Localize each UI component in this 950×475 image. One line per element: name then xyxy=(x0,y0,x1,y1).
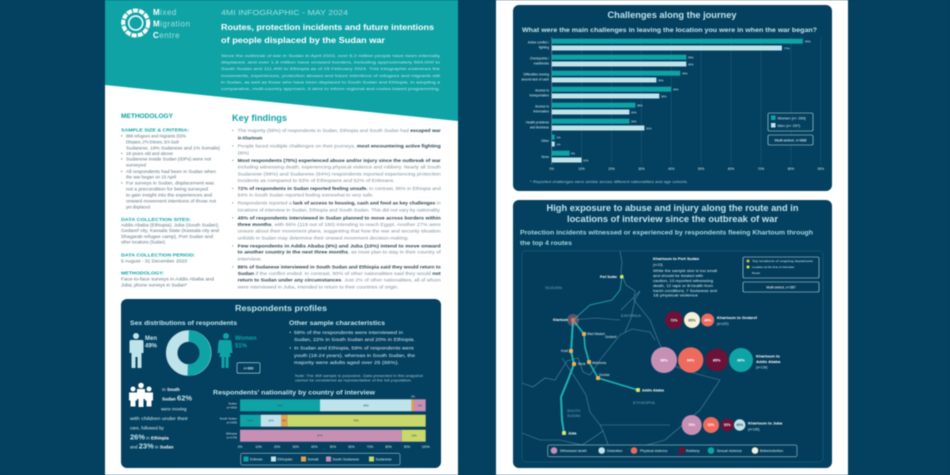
sample size text: Sudanese, 19% Sudanese and 1% Somalis) xyxy=(126,146,221,150)
sample size box xyxy=(237,363,260,373)
findings list: • xyxy=(232,158,234,163)
heading: Challenges along the journey xyxy=(608,10,736,20)
sample size text: the war began on 15 April xyxy=(126,175,176,180)
row: Sudan: (n=300) xyxy=(227,406,237,410)
legend: Somali xyxy=(308,457,319,461)
axis labels: 20% xyxy=(608,167,615,171)
row: checkpoints: Checkpoints / xyxy=(530,56,549,60)
findings list: 72% of respondents in Sudan reported feeling unsafe. In contrast, 96% in Ethiopia and xyxy=(238,186,442,191)
data collection sites: other locations (Sudan) xyxy=(121,240,166,244)
findings list: • xyxy=(232,186,234,191)
route bubbles: Khartoum to Addis Ababa xyxy=(651,347,781,373)
map: place labels: Juba xyxy=(568,432,577,436)
sample size text: SAMPLE SIZE & CRITERIA: xyxy=(121,128,190,132)
findings list: incidents as compared to 53% of Ethiopians and 52% of Eritreans. xyxy=(238,178,395,183)
row: Sudan: 49% xyxy=(363,403,369,407)
findings list: in Khartoum xyxy=(238,136,263,140)
findings list: • xyxy=(232,216,234,221)
row: Sudan: 43% xyxy=(277,403,283,407)
row: none: 6% xyxy=(571,152,576,156)
findings list: unsure about their movement plans, suggesting that how the war and security situation xyxy=(238,229,442,234)
chart title: Respondents' nationality by country of interview xyxy=(213,390,375,396)
legend: Sudanese xyxy=(376,457,392,461)
axis labels: 90% xyxy=(404,445,410,449)
map legend: protection incidents: Detention xyxy=(607,449,622,453)
sample size text: Sudanese inside Sudan (IDPs) were not xyxy=(126,157,212,162)
sample size text: All respondents had been in Sudan when xyxy=(126,169,217,174)
route bubbles: Khartoum to Juba: 76% xyxy=(688,423,695,427)
route bubbles: Khartoum to Gedaref: 72% xyxy=(670,318,678,322)
row: other: Other xyxy=(541,139,550,143)
sample size text: onward movement intentions of those not xyxy=(126,199,217,204)
route bubbles: Khartoum to Addis Ababa: (n=134) xyxy=(756,366,767,370)
findings list: three months , with 66% (119 out of 180) intending to reach Egypt. Another 27% were xyxy=(238,222,442,227)
other sample text: • xyxy=(290,346,292,350)
row: health problems: and tiredness xyxy=(530,126,549,130)
row: Sudan: 2% xyxy=(411,394,416,398)
route: Khartoum to Port Sudan note: death, 12 rape or ill-health from xyxy=(653,284,713,288)
route bubbles: Khartoum to Juba: 53% xyxy=(708,423,714,427)
row: other: 1% xyxy=(556,136,561,140)
men share xyxy=(145,336,158,350)
logo wordmark: Mixed xyxy=(153,8,177,17)
map: place labels: Renk xyxy=(578,362,586,366)
row: access to transport: Access to xyxy=(535,88,549,92)
icon: man xyxy=(130,333,144,368)
sample size text: For surveys in Sudan, displacement was xyxy=(126,181,214,186)
axis labels: 30% xyxy=(638,167,645,171)
icon: Mixed Migration Centre logo xyxy=(123,10,148,36)
subheading: Protection incidents witnessed or experienced by respondents fleeing Khartoum through xyxy=(520,230,813,236)
sex distribution heading: Sex distributions of respondents xyxy=(130,320,238,327)
map legend: markers: Route xyxy=(752,271,760,275)
sample size text: yet displaced xyxy=(126,205,151,210)
other sample text: majority were adults aged over 25 (66%). xyxy=(294,360,399,365)
row: South Sudan: (n=195) xyxy=(227,421,237,425)
other sample text xyxy=(290,330,416,365)
sample size text: • xyxy=(121,181,123,186)
map legend: protection incidents: Sexual violence xyxy=(717,449,742,453)
route bubbles: Khartoum to Juba: 52% xyxy=(724,423,731,427)
row: health problems: Health problems xyxy=(526,120,549,124)
sample size text: 888 refugees and migrants (53% xyxy=(126,134,186,138)
children callout: were moving xyxy=(161,406,187,412)
data collection sites: Addis Ababa (Ethiopia); Juba (South Sudan); xyxy=(121,222,219,228)
heading: locations of interview since the outbreak of war xyxy=(567,214,779,224)
map: place labels: Addis Ababa xyxy=(642,388,665,392)
axis labels: 40% xyxy=(668,167,675,171)
row: access to transport: 40% xyxy=(673,88,679,92)
axis labels: 90% xyxy=(818,167,824,171)
map legend: markers: Top locations of ongoing departures xyxy=(752,259,814,263)
stacked bar chart: nationality by country xyxy=(213,390,430,465)
route bubbles: Khartoum to Juba: 43% xyxy=(736,423,743,427)
men share: 49% xyxy=(145,344,158,350)
row: South Sudan: 11% xyxy=(247,419,253,423)
row: access to information: 26% xyxy=(631,110,637,114)
row: access to information xyxy=(533,103,643,114)
axis labels: 60% xyxy=(348,445,355,449)
row: access to information: 28% xyxy=(637,104,643,108)
legend xyxy=(241,453,400,465)
map: place labels: SUDAN xyxy=(545,286,562,290)
children callout: Sudan 62% xyxy=(162,394,192,402)
row: access to transport: transportation xyxy=(530,94,549,98)
key findings xyxy=(232,113,442,289)
findings list: The majority (59%) of respondents in Sudan, Ethiopia and South Sudan had escaped war xyxy=(238,128,441,133)
map: route to Juba xyxy=(561,320,574,433)
map: country borders xyxy=(522,251,720,450)
survey method xyxy=(121,270,215,288)
route: Khartoum to Port Sudan note: (n=23) xyxy=(653,263,663,267)
women share: 51% xyxy=(235,344,248,350)
multi-select note: Multi-select, n=888 xyxy=(775,138,806,142)
findings list: 94% in South Sudan reported feeling somewhat to very safe. xyxy=(238,192,374,197)
heading: High exposure to abuse and injury along the route and in xyxy=(546,203,798,213)
data collection sites: Shagarab refugee camp), Port Sudan and xyxy=(121,234,214,239)
route bubbles: Khartoum to Addis Ababa: 98% xyxy=(660,358,668,362)
map: place labels: Wad Madani xyxy=(587,332,605,336)
legend: women and men: Women (n= 269) xyxy=(778,116,807,120)
map: destination markers xyxy=(562,275,640,435)
findings list: to another country in the next three months , as most plan to stay in their country of xyxy=(238,250,442,255)
row: active fighting: 84% xyxy=(805,40,811,44)
data collection period: DATA COLLECTION PERIOD: xyxy=(121,252,196,258)
methodology column xyxy=(121,114,221,288)
findings list: interview. xyxy=(238,257,262,262)
heading: Respondents profiles xyxy=(235,304,328,313)
panel: challenges along the journey xyxy=(513,5,832,191)
row: access to transport: 36% xyxy=(661,94,667,98)
row: Ethiopia: (n=178) xyxy=(227,436,237,440)
row: difficulties moving xyxy=(521,71,688,82)
legend: Eritrean xyxy=(250,457,263,461)
map legend: protection incidents: Physical violence xyxy=(640,449,668,453)
logo wordmark: Centre xyxy=(153,31,180,40)
row: health problems: 31% xyxy=(646,126,652,130)
key findings heading: Key findings xyxy=(232,113,287,123)
axis labels: 30% xyxy=(293,445,299,449)
introduction text: displaced, and over 1.8 million have crossed borders, including approximately 564,000 to xyxy=(221,60,441,65)
row: access to transport xyxy=(530,87,679,98)
row: other xyxy=(541,135,561,146)
data collection period: 5 August - 31 December 2023 xyxy=(121,258,188,264)
map frame xyxy=(522,251,823,462)
data collection sites xyxy=(121,217,220,244)
sample size box: n=888 xyxy=(244,366,253,370)
map: place labels: Gondar xyxy=(599,373,611,377)
map legend: protection incidents: Bribe/extortion xyxy=(760,449,783,453)
route bubbles: Khartoum to Gedaref: 49% xyxy=(704,318,712,322)
route bubbles: Khartoum to Addis Ababa: Addis Ababa xyxy=(756,359,781,364)
map: place labels: ETHIOPIA xyxy=(633,401,656,405)
axis labels: 40% xyxy=(311,445,318,449)
map: place labels: ERITREA xyxy=(621,314,642,318)
sample size text: • xyxy=(121,169,123,174)
row: none: 10% xyxy=(583,158,589,162)
subheading: the top 4 routes xyxy=(520,240,573,247)
panel: page one xyxy=(105,0,458,475)
findings list: • xyxy=(232,244,234,249)
sample size text: • xyxy=(121,157,123,162)
row: active fighting: Active conflict / xyxy=(528,40,549,44)
survey method: Juba; phone surveys in Sudan* xyxy=(121,282,187,288)
findings list: Most respondents (70%) experienced abuse and/or injury since the outbreak of war xyxy=(238,158,441,163)
axis labels: 0% xyxy=(549,167,554,171)
sample note: cannot be considered as representative of the full population. xyxy=(295,378,412,382)
row: other: 1% xyxy=(556,142,561,146)
route bubbles: Khartoum to Juba xyxy=(682,415,783,435)
route: Khartoum to Port Sudan note: Khartoum to Port Sudan xyxy=(653,256,700,261)
logo wordmark: Migration xyxy=(153,20,190,28)
findings list: return to Sudan under any circumstances . Just 2% of other nationalities, all of whom xyxy=(238,277,441,282)
route: Khartoum to Port Sudan note: and should be treated with xyxy=(653,274,703,278)
heading xyxy=(546,203,798,224)
introduction text: in Sudan, as well as those who have been displaced to South Sudan and Ethiopia. In adopting a xyxy=(221,79,441,84)
map legend: markers xyxy=(743,257,819,278)
route: Khartoum to Port Sudan note: 18 physical violence xyxy=(653,294,698,298)
axis labels: 80% xyxy=(385,445,392,449)
findings list: including witnessing death, experiencing physical violence and robbery. Nearly all South xyxy=(238,164,442,169)
axis labels xyxy=(238,445,430,449)
row: active fighting: fighting xyxy=(539,46,549,50)
map: place labels: Gedaref xyxy=(605,335,617,339)
survey method: METHODOLOGY: xyxy=(121,270,165,276)
children callout xyxy=(130,387,192,450)
row: access to information: Access to xyxy=(535,104,549,108)
route bubbles: Khartoum to Gedaref xyxy=(665,311,758,329)
other sample text: • xyxy=(290,330,292,335)
children callout: care, followed by xyxy=(130,426,165,430)
panel: respondents profiles xyxy=(121,299,441,468)
map multi-select note xyxy=(743,282,819,292)
route bubbles: Khartoum to Gedaref: 65% xyxy=(688,318,696,322)
findings list: • xyxy=(232,265,234,270)
axis labels: 100% xyxy=(422,445,430,449)
other sample heading: Other sample characteristics xyxy=(289,320,386,327)
route bubbles: Khartoum to Juba: Khartoum to Juba xyxy=(748,420,783,426)
findings list: • xyxy=(232,201,234,206)
row: Ethiopia: Ethiopia xyxy=(226,432,237,436)
sample size text: • xyxy=(121,134,123,138)
footnote: * Reported challenges were similar across different nationalities and age cohorts. xyxy=(530,180,688,184)
axis labels: 0% xyxy=(238,445,242,449)
findings list: (80%) xyxy=(238,150,249,156)
findings list: Few respondents in Addis Ababa (9%) and Juba (10%) intend to move onward xyxy=(238,244,441,249)
map: place labels: Metemma xyxy=(592,361,606,365)
row: none xyxy=(541,151,589,162)
row: Ethiopia: 13% xyxy=(411,434,417,438)
row: Sudan: Sudan xyxy=(228,402,237,406)
row: health problems: 26% xyxy=(631,120,637,124)
methodology heading: METHODOLOGY xyxy=(121,114,173,120)
route bubbles: Khartoum to Gedaref: Khartoum to Gedaref xyxy=(717,315,758,320)
title: Routes, protection incidents and future intentions xyxy=(221,23,435,32)
map: place labels: Port Sudan xyxy=(600,275,617,279)
row: Sudan: 6% xyxy=(418,403,423,407)
children callout: with children under their xyxy=(130,416,189,421)
logo wordmark xyxy=(153,8,190,40)
row: health problems xyxy=(526,119,652,130)
row: checkpoints xyxy=(530,55,694,66)
route: Khartoum to Port Sudan note: While the sample size is too small xyxy=(653,269,717,273)
women share xyxy=(235,336,257,350)
route: Khartoum to Port Sudan note: caution, 13 reported witnessing xyxy=(653,279,713,283)
axis labels: 10% xyxy=(578,167,585,171)
header band xyxy=(105,0,458,121)
row: none: None xyxy=(541,155,549,159)
route bubbles: Khartoum to Gedaref: (n=107) xyxy=(717,322,728,326)
panel: page two xyxy=(496,0,848,475)
row: Ethiopia xyxy=(226,430,426,442)
row: active fighting xyxy=(528,39,811,50)
axis labels: 70% xyxy=(367,445,373,449)
legend: women and men xyxy=(768,113,813,131)
icon: family xyxy=(129,383,153,407)
women share: Women xyxy=(235,336,257,342)
sample size text: Ethiopians, 27% Eritreans, 31% South xyxy=(126,140,180,144)
row: difficulties moving: around lack of cash xyxy=(521,78,549,82)
findings list: • xyxy=(232,143,234,148)
data collection sites: DATA COLLECTION SITES: xyxy=(121,217,192,222)
findings list: Respondents reported a lack of access to housing, cash and food as key challenges in xyxy=(238,201,441,206)
introduction text xyxy=(221,53,441,91)
row: South Sudan xyxy=(220,415,426,427)
children callout: 26% in Ethiopia xyxy=(130,432,169,442)
map: place labels: SUDAN xyxy=(567,414,581,418)
findings list: were interviewed in Juba, intended to return to their countries of origin. xyxy=(238,284,399,289)
sample note xyxy=(295,374,423,382)
row: Ethiopia: 87% xyxy=(317,434,323,438)
sample size text: 18 years old and above xyxy=(126,151,174,156)
legend: South Sudanese xyxy=(332,457,359,461)
introduction text: comparative, multi-country approach, it aims to inform regional and routes-based programming. xyxy=(221,86,440,91)
axis labels: 20% xyxy=(274,445,280,449)
findings list: Sudan if the conflict ended. In contrast, 80% of other nationalities said they would not xyxy=(238,271,441,276)
row: checkpoints: roadblocks xyxy=(534,62,549,66)
introduction text: Since the outbreak of war in Sudan in April 2023, over 6.2 million people have been internally xyxy=(221,53,440,58)
row: difficulties moving: 43% xyxy=(682,72,688,76)
map: place labels: Khartoum xyxy=(553,318,568,322)
map legend: markers: Location at the time of interview xyxy=(752,265,795,269)
bar chart: challenges by sex xyxy=(521,37,824,171)
question: What were the main challenges in leaving the location you were in when the war began? xyxy=(522,27,817,34)
axis labels: 60% xyxy=(728,167,734,171)
findings list: Sudanese (99%) and Sudanese (94%) respondents reported experiencing protection xyxy=(238,171,442,176)
report label: 4MI INFOGRAPHIC - MAY 2024 xyxy=(221,10,348,17)
findings list xyxy=(232,128,442,289)
map legend: protection incidents: Robbery xyxy=(686,449,700,453)
row: checkpoints: 45% xyxy=(688,62,694,66)
map legend: protection incidents xyxy=(548,445,797,457)
route: Khartoum to Port Sudan note xyxy=(653,256,717,298)
map multi-select note: Multi-select, n=387 xyxy=(766,286,796,290)
subheading xyxy=(520,230,813,247)
survey method: Face-to-face surveys in Addis Ababa and xyxy=(121,276,215,282)
row: access to information: information xyxy=(533,110,549,114)
other sample text: In Sudan and Ethiopia, 59% of respondents were xyxy=(294,346,415,350)
introduction text: movements, experiences, protection abuses and future intentions of refugees and migrants still xyxy=(221,73,440,78)
axis labels xyxy=(549,167,824,171)
route bubbles: Khartoum to Addis Ababa: 85% xyxy=(713,358,721,362)
route bubbles: Khartoum to Addis Ababa: 94% xyxy=(687,358,695,362)
men share: Men xyxy=(145,336,157,342)
multi-select note xyxy=(768,135,813,145)
findings list: • xyxy=(232,128,234,133)
sample size text: to gain insight into the experiences and xyxy=(126,193,213,198)
axis labels: 70% xyxy=(758,167,764,171)
other sample text: youth (18-24 years), whereas in South Sudan, the xyxy=(294,353,416,358)
axis labels: 80% xyxy=(788,167,794,171)
row: difficulties moving: Difficulties moving xyxy=(523,72,549,76)
map: transit markers xyxy=(569,332,600,380)
sample note: Note: The 4Mi sample is purposive. Data presented in this snapshot xyxy=(295,374,423,378)
row: South Sudan: 11% xyxy=(268,419,274,423)
sample size text: • xyxy=(121,151,123,156)
route bubbles: Khartoum to Juba: (n=100) xyxy=(748,428,759,432)
row: Sudan xyxy=(227,394,426,411)
other sample text: 58% of the respondents were interviewed in xyxy=(294,330,404,335)
row: checkpoints: 45% xyxy=(688,56,694,60)
route bubbles: Khartoum to Addis Ababa: 89% xyxy=(737,358,745,362)
map: place labels: SOUTH xyxy=(567,409,581,413)
row: South Sudan: South Sudan xyxy=(220,417,237,421)
children callout: and 23% in Sudan xyxy=(130,442,174,450)
row: active fighting: 77% xyxy=(784,46,790,50)
route bubbles: Khartoum to Addis Ababa: Khartoum to xyxy=(756,354,780,358)
title xyxy=(221,23,435,45)
map: place labels: Kosti xyxy=(561,349,568,353)
legend: women and men: Men (n= 297) xyxy=(778,124,801,128)
panel: exposure to abuse and injury xyxy=(513,200,832,468)
title: of people displaced by the Sudan war xyxy=(221,36,385,45)
sample size text: surveyed xyxy=(126,162,147,167)
findings list: unfolds in Sudan may determine their onward movement decision-making. xyxy=(238,235,409,240)
findings list: 86% of Sudanese interviewed in South Sudan and Ethiopia said they would return to xyxy=(238,265,441,270)
other sample text: Sudan, 22% in South Sudan and 20% in Ethiopia. xyxy=(294,337,415,342)
sample size text: not a precondition for being surveyed xyxy=(126,187,209,192)
sample size text xyxy=(121,128,221,210)
row: difficulties moving: 35% xyxy=(658,78,664,82)
map: Khartoum marker xyxy=(567,314,579,326)
map legend: protection incidents: Witnessed death xyxy=(560,449,587,453)
legend: Ethiopian xyxy=(278,457,292,461)
row: South Sudan: 75% xyxy=(353,419,359,423)
introduction text: South Sudan and 111,400 to Ethiopia as of 25 February 2024. This infographic examines the xyxy=(221,66,441,71)
icon: woman xyxy=(218,333,232,368)
map: place labels xyxy=(545,275,665,436)
children callout: In South xyxy=(162,387,180,392)
findings list: 45% of respondents interviewed in Sudan planned to move across borders within xyxy=(238,216,441,221)
axis labels: 50% xyxy=(698,167,705,171)
findings list: locations of interview in Sudan, Ethiopia and South Sudan. This did not vary by nationality. xyxy=(238,207,441,212)
findings list: People faced multiple challenges on their journeys, most encountering active fighting xyxy=(238,143,441,148)
row: South Sudan: 3% xyxy=(282,419,287,423)
axis labels: 50% xyxy=(330,445,336,449)
map: route to Port Sudan xyxy=(573,277,622,320)
data collection sites: Gedaref city, Kassala State (Kassala city and xyxy=(121,228,220,233)
map: route to Addis Ababa and Gedaref xyxy=(573,320,638,390)
axis labels: 10% xyxy=(255,445,262,449)
route: Khartoum to Port Sudan note: harsh conditions, 7 Sudanese and xyxy=(653,289,717,293)
data collection period xyxy=(121,252,196,264)
donut chart: sex split xyxy=(172,336,206,370)
